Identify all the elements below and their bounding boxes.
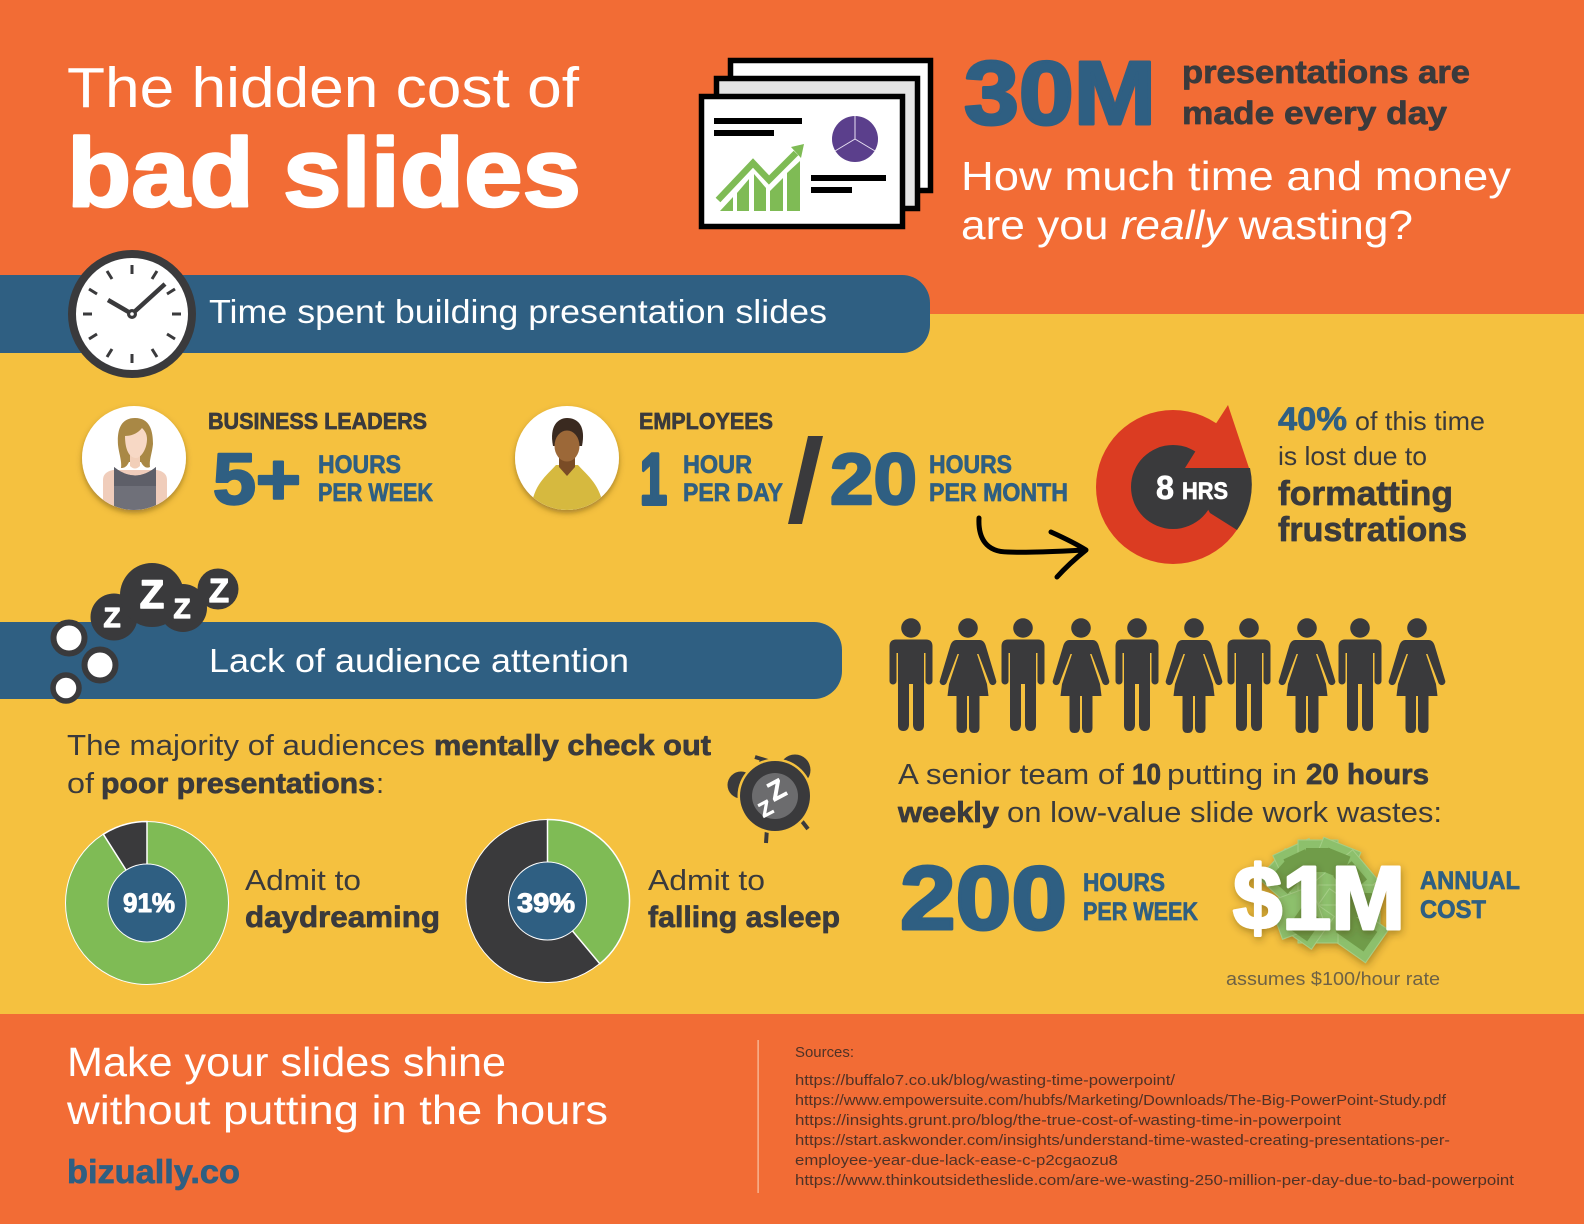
sources list: Sources:	[795, 1045, 854, 1061]
callout: 40% lost to formatting	[1278, 401, 1485, 549]
icon: sleeping z bubbles	[53, 563, 238, 701]
arrow: to 8 hours chart	[979, 518, 1086, 577]
sources list: https://insights.grunt.pro/blog/the-true-cost-of-wasting-time-in-powerpoint	[795, 1113, 1341, 1129]
team description text: A senior team of	[898, 759, 1125, 791]
employees stat: 1	[640, 440, 667, 520]
heading bar: audience attention	[0, 622, 842, 699]
employees stat: PER MONTH	[929, 479, 1068, 507]
audience text: mentally check out	[434, 730, 711, 762]
question text: are you really wasting?	[961, 202, 1413, 248]
sources list: https://www.thinkoutsidetheslide.com/are-we-wasting-250-million-per-day-due-to-bad-powerpoint	[795, 1173, 1514, 1189]
audience text: of	[67, 768, 95, 800]
business leaders stat: HOURS	[318, 451, 401, 479]
heading bar: time spent	[0, 275, 930, 353]
stat: 30M presentations	[964, 44, 1470, 144]
heading bar: audience attention: Lack of audience attention	[209, 642, 629, 679]
chart: 8 hours circular arrow	[1096, 405, 1252, 564]
team description text	[897, 759, 1442, 829]
icon: businesswoman portrait	[82, 406, 186, 512]
audience text: poor presentations	[101, 768, 375, 800]
icon: sleeping z bubbles: Z	[140, 573, 164, 617]
footer call to action: bizually.co	[67, 1153, 240, 1190]
title	[67, 56, 581, 227]
icon: alarm clock	[728, 754, 812, 843]
chart: 8 hours circular arrow: 8	[1156, 469, 1174, 506]
audience text: The majority of audiences	[67, 730, 425, 762]
business leaders stat: BUSINESS LEADERS	[208, 408, 427, 434]
stat: $1M annual cost: $1M	[1233, 849, 1405, 949]
sources list: https://www.empowersuite.com/hubfs/Marketing/Downloads/The-Big-PowerPoint-Study.pdf	[795, 1093, 1447, 1109]
team description text: 10	[1132, 759, 1161, 791]
sources list	[795, 1045, 1514, 1189]
stat: $1M annual cost: COST	[1420, 896, 1486, 924]
question text	[961, 153, 1512, 248]
audience text	[67, 730, 711, 800]
donut chart: 39% falling asleep	[466, 819, 629, 982]
donut chart: 39% falling asleep: 39%	[517, 888, 575, 918]
label: falling asleep: Admit to	[648, 865, 765, 897]
employees stat: PER DAY	[683, 479, 783, 507]
icon: alarm clock: Z	[755, 796, 777, 822]
title: bad slides	[67, 118, 581, 227]
callout: 40% lost to formatting: 40%	[1278, 401, 1347, 437]
employees stat: EMPLOYEES	[639, 408, 773, 434]
icon: clock	[72, 254, 192, 374]
icon: employee portrait	[515, 406, 619, 512]
footer call to action: Make your slides shine	[67, 1039, 506, 1085]
audience text: :	[376, 768, 384, 800]
sources list: employee-year-due-lack-ease-c-p2cgaozu8	[795, 1153, 1118, 1169]
donut chart: 91% daydreaming: 91%	[123, 888, 175, 918]
question text: How much time and money	[961, 153, 1512, 199]
employees stat: HOURS	[929, 451, 1012, 479]
icon: stack of presentation slides	[702, 60, 930, 226]
footer call to action	[66, 1039, 608, 1190]
team description text: 20 hours	[1306, 759, 1429, 791]
stat: 30M presentations: 30M	[964, 44, 1156, 144]
icon row: team of ten people	[890, 618, 1445, 733]
label: daydreaming: Admit to	[245, 865, 361, 897]
business leaders stat: PER WEEK	[318, 479, 433, 507]
callout: 40% lost to formatting: of this time	[1355, 406, 1485, 436]
callout: 40% lost to formatting: formatting	[1278, 475, 1453, 513]
footnote: rate assumption: assumes $100/hour rate	[1226, 968, 1440, 989]
stat: 200 hours per week: 200	[900, 849, 1067, 949]
business leaders stat	[208, 408, 433, 520]
stat: 200 hours per week	[900, 849, 1198, 949]
icon: sleeping z bubbles: Z	[103, 602, 121, 633]
business leaders stat: 5+	[213, 440, 301, 520]
header band	[0, 0, 1584, 314]
footer call to action: without putting in the hours	[66, 1087, 608, 1133]
callout: 40% lost to formatting: is lost due to	[1278, 441, 1427, 471]
icon: alarm clock: Z	[762, 773, 791, 807]
label: falling asleep	[648, 865, 840, 934]
stat: $1M annual cost	[1233, 849, 1520, 949]
title: The hidden cost of	[67, 56, 579, 120]
callout: 40% lost to formatting: frustrations	[1278, 511, 1467, 549]
icon: sleeping z bubbles: Z	[209, 572, 229, 609]
icon: sleeping z bubbles: Z	[173, 593, 191, 624]
label: daydreaming	[245, 865, 440, 934]
employees stat: HOUR	[683, 451, 752, 479]
employees stat	[639, 408, 1068, 524]
stat: $1M annual cost: ANNUAL	[1420, 867, 1520, 895]
stat: 30M presentations: made every day	[1182, 95, 1447, 131]
label: daydreaming: daydreaming	[245, 901, 440, 934]
sources list: https://start.askwonder.com/insights/understand-time-wasted-creating-presentations-per-	[795, 1133, 1450, 1149]
chart: 8 hours circular arrow: HRS	[1182, 478, 1228, 505]
stat: 200 hours per week: HOURS	[1083, 869, 1165, 897]
employees stat: 20	[830, 440, 917, 520]
footer band	[0, 1014, 1584, 1224]
sources list: https://buffalo7.co.uk/blog/wasting-time-powerpoint/	[795, 1073, 1176, 1089]
donut chart: 91% daydreaming	[66, 822, 228, 984]
team description text: weekly	[897, 797, 999, 829]
heading bar: time spent: Time spent building presentation slides	[209, 293, 827, 330]
stat: 200 hours per week: PER WEEK	[1083, 898, 1198, 926]
label: falling asleep: falling asleep	[648, 901, 840, 934]
stat: 30M presentations: presentations are	[1182, 54, 1470, 90]
icon: fan of money behind $1M	[1259, 837, 1388, 963]
team description text: on low-value slide work wastes:	[1007, 797, 1442, 829]
team description text: putting in	[1167, 759, 1297, 791]
